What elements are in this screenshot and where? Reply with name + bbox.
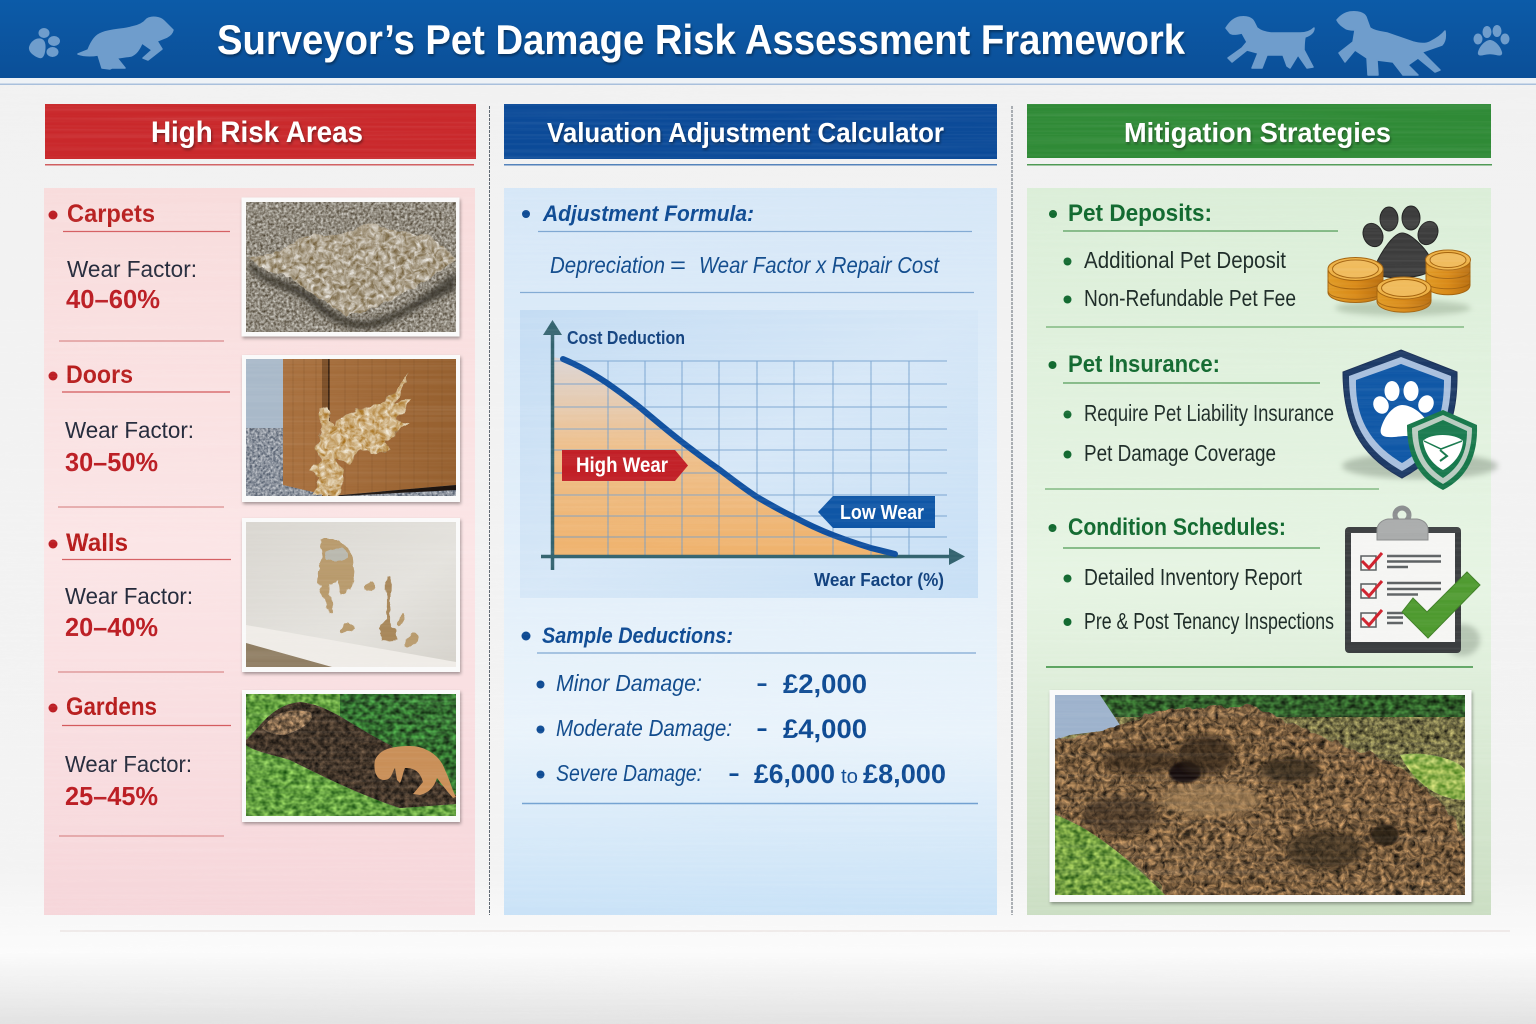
row: moderate damage: £4,000 — [783, 714, 867, 744]
section: pet insurance — [1045, 351, 1379, 489]
photo: dog digging garden — [242, 690, 460, 822]
item: carpets: 40–60% — [66, 284, 160, 314]
paw on shield — [1370, 381, 1437, 437]
adjustment formula: Wear Factor x Repair Cost — [699, 252, 940, 278]
section: condition schedules: Pre & Post Tenancy Inspections — [1084, 608, 1334, 634]
y axis label: Cost Deduction — [567, 328, 685, 348]
chart: cost deduction vs wear factor — [520, 310, 978, 598]
row: severe damage — [536, 758, 946, 789]
panel: high risk areas — [44, 188, 475, 915]
item: walls: Walls — [66, 529, 128, 557]
photo: scratched door — [242, 355, 460, 502]
item: carpets: Wear Factor: — [67, 256, 197, 282]
x axis label: Wear Factor (%) — [814, 570, 944, 590]
chart axes — [541, 320, 965, 570]
photo: dug-up garden soil — [1050, 690, 1472, 902]
sample deductions — [522, 623, 978, 804]
column dividers — [490, 106, 1012, 915]
section: pet insurance: Pet Insurance: — [1068, 351, 1220, 378]
section: pet deposits: Additional Pet Deposit — [1084, 247, 1287, 273]
item: walls: Wear Factor: — [65, 583, 193, 609]
item: carpets — [48, 200, 230, 341]
item: walls: 20–40% — [65, 612, 158, 642]
section: condition schedules: Detailed Inventory Report — [1084, 564, 1303, 590]
header: High Risk Areas: High Risk Areas — [151, 116, 363, 149]
row: severe damage: – — [729, 758, 739, 788]
item: gardens: 25–45% — [65, 781, 158, 811]
section: condition schedules: Condition Schedules: — [1068, 514, 1286, 541]
coin stack right — [1426, 250, 1470, 295]
panel: mitigation strategies — [1027, 188, 1498, 915]
section: pet insurance: Pet Damage Coverage — [1084, 440, 1276, 466]
section: condition schedules — [1046, 514, 1473, 667]
row: moderate damage: – — [757, 713, 767, 743]
icon: walking dog — [1226, 17, 1314, 68]
header: Valuation Adjustment Calculator: Valuation Adjustment Calculator — [547, 117, 944, 148]
photo: damaged carpet — [242, 198, 460, 336]
item: doors: Doors — [66, 361, 133, 389]
section: pet insurance: Require Pet Liability Insurance — [1084, 400, 1334, 426]
icon: right paw print — [1474, 25, 1510, 56]
title banner — [0, 0, 1536, 85]
chart area fill — [553, 357, 895, 555]
small green shield — [1407, 410, 1477, 490]
icon: paw and coins — [1328, 206, 1471, 316]
row: moderate damage: Moderate Damage: — [556, 715, 732, 741]
callout: low wear: Low Wear — [840, 502, 924, 524]
coin stack left — [1328, 258, 1383, 302]
row: severe damage: £8,000 — [863, 759, 946, 789]
row: minor damage: Minor Damage: — [556, 670, 702, 696]
header: High Risk Areas — [45, 104, 476, 166]
callout: high wear: High Wear — [576, 454, 668, 477]
row: severe damage: Severe Damage: — [556, 760, 702, 786]
item: gardens: Gardens — [66, 693, 157, 721]
chart curve — [563, 359, 895, 554]
section: pet deposits: Pet Deposits: — [1068, 200, 1212, 227]
item: carpets: Carpets — [67, 200, 155, 228]
row: minor damage: £2,000 — [783, 669, 867, 699]
header: Mitigation Strategies: Mitigation Strategies — [1124, 117, 1391, 148]
row: minor damage — [536, 668, 867, 699]
item: doors: Wear Factor: — [65, 417, 194, 443]
adjustment formula: Depreciation — [550, 252, 665, 278]
adjustment formula: Adjustment Formula: — [542, 201, 754, 226]
icon: running dog — [1337, 12, 1445, 75]
item: gardens: Wear Factor: — [65, 751, 192, 777]
row: severe damage: £6,000 — [754, 759, 835, 789]
callout: low wear — [818, 496, 935, 528]
icon: leaping dog left — [78, 17, 173, 69]
row: moderate damage — [536, 713, 867, 744]
header: Valuation Adjustment Calculator — [504, 104, 997, 166]
item: doors — [48, 361, 230, 507]
photo: damaged wall — [242, 518, 460, 672]
icon: insurance shields — [1342, 350, 1498, 490]
icon: clipboard checklist — [1345, 508, 1480, 656]
row: minor damage: – — [757, 668, 767, 698]
section: pet deposits — [1046, 200, 1464, 327]
adjustment formula — [520, 201, 974, 292]
item: walls — [48, 529, 231, 672]
sample deductions: Sample Deductions: — [542, 623, 733, 648]
section: pet deposits: Non-Refundable Pet Fee — [1084, 285, 1296, 311]
adjustment formula: = — [670, 252, 686, 278]
panel: valuation calculator — [504, 188, 997, 915]
header: Mitigation Strategies — [1027, 104, 1492, 166]
callout: high wear — [562, 450, 688, 481]
item: doors: 30–50% — [65, 447, 158, 477]
title: Surveyor’s Pet Damage Risk Assessment Framework — [217, 16, 1186, 63]
coin stack front — [1377, 277, 1431, 312]
row: severe damage: to — [841, 766, 858, 788]
item: gardens — [48, 693, 231, 836]
icon: left paw print — [29, 28, 60, 58]
